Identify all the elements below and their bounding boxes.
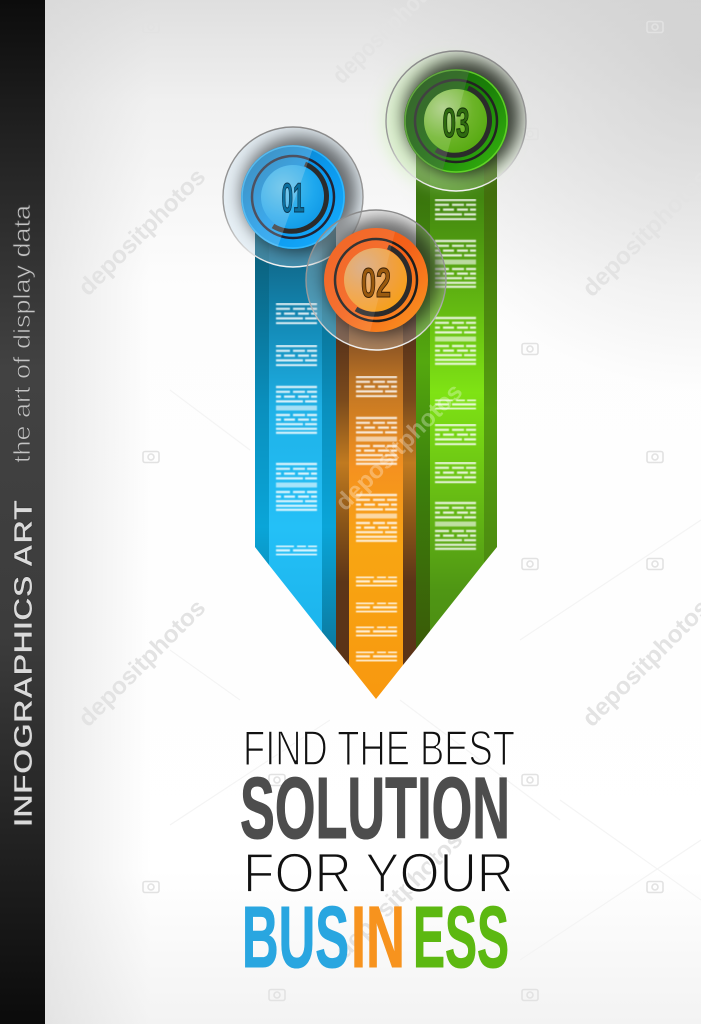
headline: for your: FOR YOUR [243,841,514,904]
badge 03 [382,51,526,191]
badge 01 [223,127,363,267]
headline: find the best: FIND THE BEST [243,722,515,776]
watermark layer: depositphotos [330,826,468,964]
arrow column: orange [336,280,416,699]
arrow column: green [416,121,497,649]
watermark layer: depositphotos [73,163,211,301]
headline: business [242,889,509,986]
sidebar tagline: the art of display data [9,205,35,463]
headline: business: ESS [413,889,509,986]
badge 01: 01 [282,174,304,221]
number 02: 02 [361,259,391,306]
headline: business: BUS [242,889,349,986]
headline: business: IN [351,889,405,986]
watermark over columns: depositphotos [330,378,468,516]
sidebar brand name: INFOGRAPHICS ART [8,500,38,827]
arrow column: blue [255,197,336,649]
headline: solution: SOLUTION [240,760,510,857]
badge 02 [306,210,446,350]
sidebar [0,0,45,1024]
watermark layer: depositphotos [73,594,211,732]
number 03: 03 [443,99,469,146]
